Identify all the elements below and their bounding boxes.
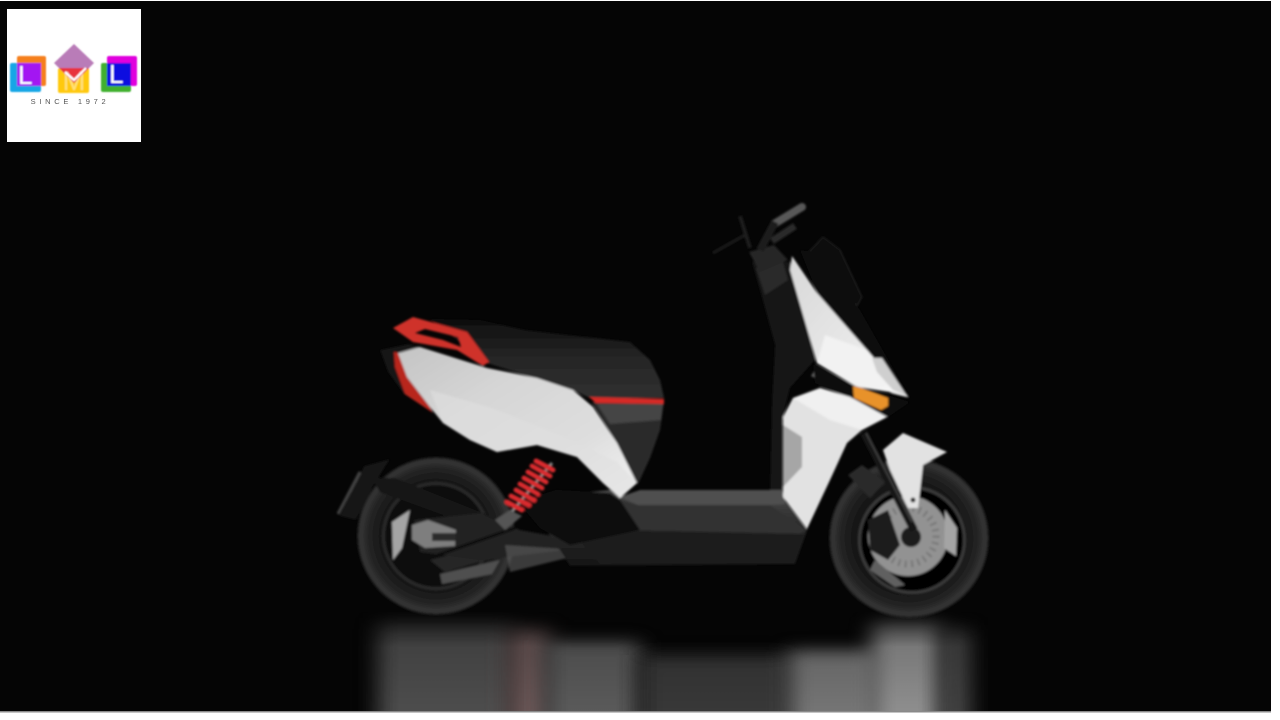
red grab handle	[393, 317, 489, 366]
floorboard and lower body	[518, 490, 807, 566]
logo letter L right: L	[109, 59, 123, 89]
logo tagline: SINCE 1972	[31, 97, 109, 106]
logo letter M centre: M	[63, 66, 85, 96]
tail black section	[380, 344, 432, 412]
handlebar and levers	[713, 207, 802, 272]
white lower front panel	[783, 388, 887, 529]
rear mudguard and plate holder	[338, 459, 505, 532]
headlight	[872, 358, 907, 396]
logo box	[7, 9, 141, 142]
white rear body panel	[398, 347, 637, 498]
dark nose beak	[813, 364, 910, 417]
rear wheel	[357, 457, 515, 615]
under-seat trunk	[592, 402, 664, 484]
scooter	[338, 207, 989, 618]
red tail light	[394, 352, 433, 413]
front suspension fork	[848, 433, 914, 530]
front wheel	[829, 458, 989, 618]
red seat trim	[589, 397, 664, 404]
logo letter L left: L	[18, 60, 32, 90]
floor reflection	[378, 618, 970, 720]
black nose trim	[800, 250, 910, 398]
windshield	[808, 237, 862, 306]
swingarm	[412, 513, 580, 572]
amber indicator	[853, 386, 888, 410]
grey chin panel	[811, 367, 853, 399]
dark spine and steering column	[752, 262, 815, 490]
seat	[430, 319, 664, 398]
rear shock absorber	[495, 461, 553, 530]
front fender	[883, 433, 947, 508]
front brake disc	[868, 496, 957, 587]
white front shield	[790, 256, 908, 397]
